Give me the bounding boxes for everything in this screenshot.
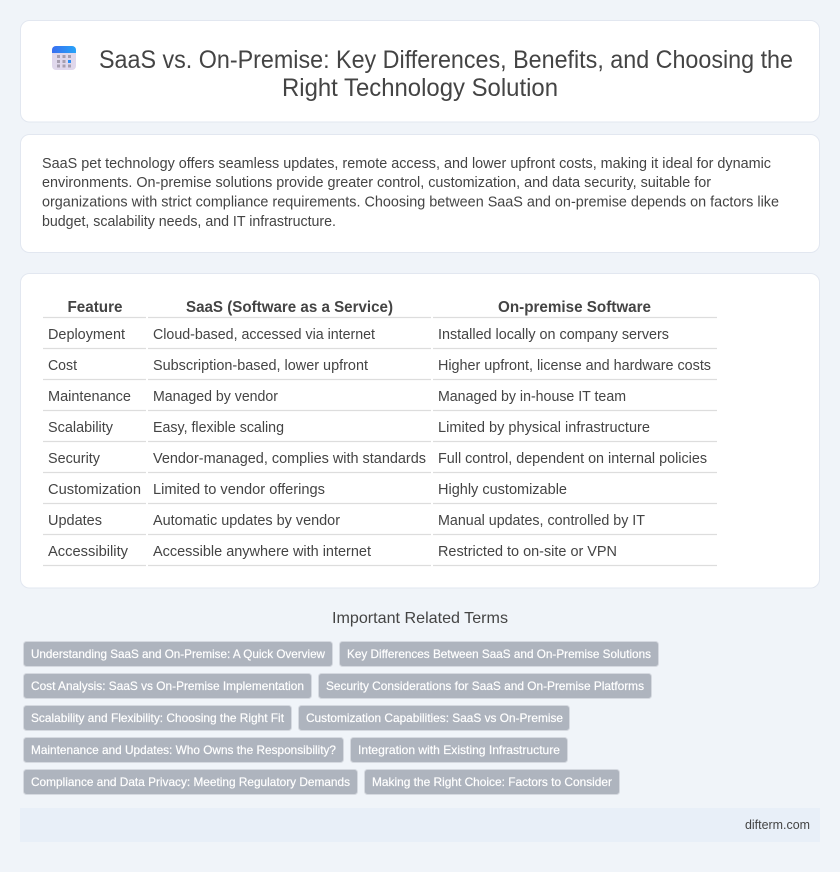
row: accessibility: Accessibility (48, 544, 129, 560)
panel: intro text: budget, scalability needs, and IT infrastructure. (42, 214, 336, 230)
tag: security (318, 674, 652, 698)
row: updates: Updates (48, 513, 102, 529)
tag: scalability: Scalability and Flexibility: Choosing the Right Fit (31, 711, 285, 725)
row: scalability: Limited by physical infrastructure (438, 420, 650, 436)
table header: SaaS (Software as a Service) (186, 299, 393, 316)
row: maintenance: Managed by vendor (153, 389, 278, 405)
row: security: Full control, dependent on internal policies (438, 451, 707, 467)
tag: integration (350, 738, 568, 762)
panel: intro text (20, 134, 820, 252)
title: Right Technology Solution (282, 74, 558, 102)
row: scalability: Scalability (48, 420, 114, 436)
row: cost: Cost (48, 358, 77, 374)
row: customization: Limited to vendor offerings (153, 482, 325, 498)
row: customization: Customization (48, 482, 141, 498)
row: customization (48, 482, 567, 498)
row: updates: Automatic updates by vendor (153, 513, 340, 529)
row: accessibility (48, 544, 617, 560)
row: cost (48, 358, 711, 374)
row: accessibility: Accessible anywhere with internet (153, 544, 371, 560)
tag: right choice: Making the Right Choice: Factors to Consider (372, 775, 612, 789)
panel: comparison table (20, 274, 820, 588)
panel: intro text: environments. On-premise solutions provide greater control, customization, and data security, suitable for (42, 175, 711, 191)
tag: scalability (24, 706, 292, 730)
tag: integration: Integration with Existing Infrastructure (358, 743, 560, 757)
table header: On-premise Software (498, 299, 651, 316)
tag: customization (298, 706, 570, 730)
tag: key differences (340, 642, 658, 666)
title (99, 46, 793, 102)
row: deployment: Installed locally on company servers (438, 327, 669, 343)
panel: intro text: organizations with strict compliance requirements. Choosing between SaaS and on-premise depends on factors like (42, 194, 779, 210)
row: updates (48, 513, 645, 529)
row: security: Vendor-managed, complies with standards (153, 451, 426, 467)
row: customization: Highly customizable (438, 482, 567, 498)
tag: customization: Customization Capabilities: SaaS vs On-Premise (306, 711, 563, 725)
row: security: Security (48, 451, 101, 467)
tag: quick overview (24, 642, 332, 666)
tag: security: Security Considerations for SaaS and On-Premise Platforms (326, 679, 644, 693)
tag: compliance (24, 770, 358, 794)
title: SaaS vs. On-Premise: Key Differences, Benefits, and Choosing the (99, 46, 793, 74)
row: cost: Higher upfront, license and hardware costs (438, 358, 711, 374)
tag: cost analysis (24, 674, 312, 698)
tag: maintenance (24, 738, 344, 762)
panel: header (20, 20, 820, 122)
row: scalability (48, 420, 650, 436)
row: maintenance (48, 389, 626, 405)
row: accessibility: Restricted to on-site or VPN (438, 544, 617, 560)
row: security (48, 451, 707, 467)
panel: intro text: SaaS pet technology offers seamless updates, remote access, and lower upfront costs, making it ideal for dynamic (42, 156, 771, 172)
row: maintenance: Managed by in-house IT team (438, 389, 626, 405)
table header: Feature (68, 299, 123, 316)
heading: related terms: Important Related Terms (332, 610, 508, 627)
tag: key differences: Key Differences Between SaaS and On-Premise Solutions (347, 647, 651, 661)
tag: quick overview: Understanding SaaS and On-Premise: A Quick Overview (31, 647, 325, 661)
related term tags (24, 642, 658, 794)
tag: right choice (364, 770, 620, 794)
tag: maintenance: Maintenance and Updates: Who Owns the Responsibility? (31, 743, 336, 757)
row: cost: Subscription-based, lower upfront (153, 358, 368, 374)
row: updates: Manual updates, controlled by IT (438, 513, 645, 529)
row: scalability: Easy, flexible scaling (153, 420, 284, 436)
table header (68, 299, 651, 316)
footer (20, 808, 820, 842)
icon: calendar (52, 46, 76, 70)
row: maintenance: Maintenance (48, 389, 131, 405)
row: deployment: Cloud-based, accessed via internet (153, 327, 375, 343)
tag: compliance: Compliance and Data Privacy: Meeting Regulatory Demands (31, 775, 350, 789)
footer: difterm.com (745, 817, 810, 832)
row: deployment: Deployment (48, 327, 125, 343)
tag: cost analysis: Cost Analysis: SaaS vs On-Premise Implementation (31, 679, 304, 693)
row: deployment (48, 327, 669, 343)
